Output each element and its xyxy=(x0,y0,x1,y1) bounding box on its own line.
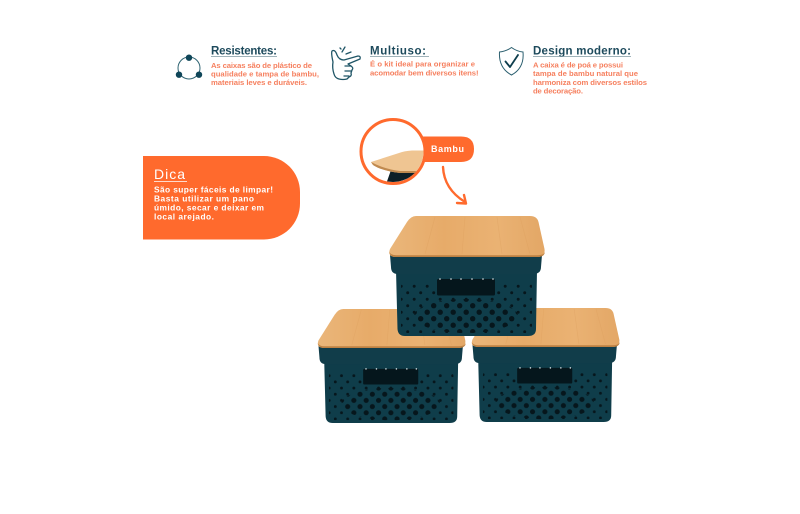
feature: Multiuso: É o kit ideal para organizar e xyxy=(370,60,476,68)
icon: three-point ring xyxy=(176,54,202,79)
feature: Design moderno: tampa de bambu natural que xyxy=(533,69,639,78)
feature: Resistentes: As caixas são de plástico de xyxy=(211,61,313,70)
product: top storage box xyxy=(389,216,545,336)
panel: Dica: local arejado. xyxy=(154,212,214,222)
icon: shield with check xyxy=(499,48,523,75)
feature: Design moderno xyxy=(533,46,647,96)
panel: Dica: São super fáceis de limpar! xyxy=(154,185,273,195)
callout: Bambu: Bambu xyxy=(431,144,464,154)
callout: Bambu xyxy=(361,120,474,190)
feature: Multiuso: Multiuso: xyxy=(370,46,426,58)
feature: Resistentes xyxy=(211,46,319,87)
icon: pointing hand xyxy=(332,47,360,80)
product: left storage box xyxy=(318,309,466,423)
product: right storage box xyxy=(472,308,620,422)
feature: Design moderno: de decoração. xyxy=(533,86,583,96)
panel: Dica: Dica xyxy=(154,166,185,182)
panel: Dica: úmido, secar e deixar em xyxy=(154,202,264,212)
feature: Multiuso xyxy=(370,46,478,78)
feature: Resistentes: qualidade e tampa de bambu, xyxy=(211,70,319,78)
feature: Design moderno: A caixa é de poá e possui xyxy=(533,60,623,70)
feature: Resistentes: materiais leves e duráveis. xyxy=(211,78,307,87)
feature: Design moderno: Design moderno: xyxy=(533,46,631,58)
panel: Dica: Basta utilizar um pano xyxy=(154,194,254,204)
feature: Multiuso: acomodar bem diversos itens! xyxy=(370,68,478,78)
feature: Design moderno: harmoniza com diversos estilos xyxy=(533,78,647,87)
panel: Dica xyxy=(143,156,300,240)
arrow: callout to box xyxy=(443,167,466,204)
feature: Resistentes: Resistentes: xyxy=(211,46,277,58)
